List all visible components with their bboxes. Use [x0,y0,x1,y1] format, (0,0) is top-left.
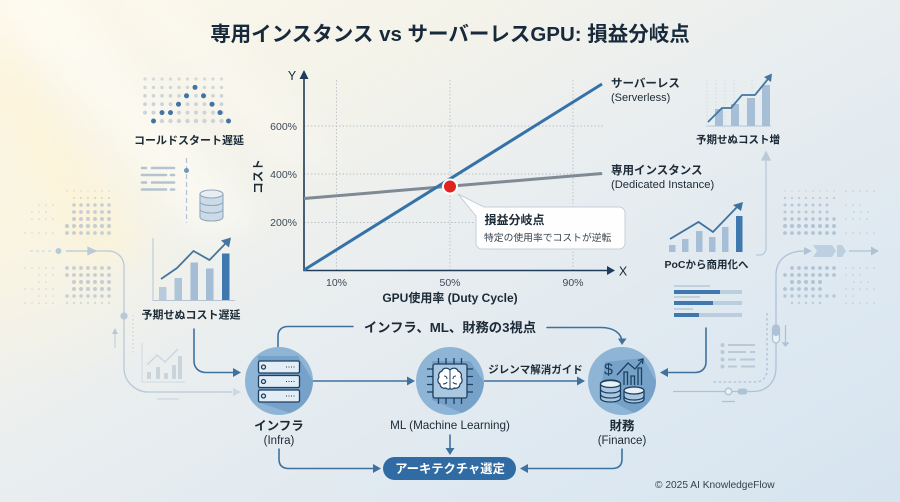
pill: architecture selection: アーキテクチャ選定 [395,462,505,476]
icon: chip with brain [427,358,473,404]
pill: architecture selection [383,457,516,480]
label: finance: (Finance) [598,435,646,447]
axis labels: 90% [562,277,584,289]
label: unexpected cost increase: 予期せぬコスト増 [696,133,780,146]
label: dedicated instance: 専用インスタンス [611,163,703,177]
icon: server rack [258,361,300,402]
title: 専用インスタンス vs サーバーレスGPU: 損益分岐点 [210,22,690,46]
chart: break-even line chart [253,69,628,305]
label: infra [254,419,304,447]
chart: faded growth icon [142,343,185,382]
label: serverless: サーバーレス [611,77,680,90]
connector: PoC to cost increase [756,152,770,255]
right dot patterns [785,191,880,303]
copyright: © 2025 AI KnowledgeFlow [655,480,775,491]
node: ML [416,347,484,415]
node: finance [588,347,656,415]
label: three perspectives: インフラ、ML、財務の3視点 [364,319,536,335]
label: dedicated instance [611,163,715,191]
callout: break-even: 損益分岐点 [484,212,545,227]
axis labels: 600% [270,121,297,133]
icon: progress bars [674,286,742,317]
axis labels: Y [288,69,297,83]
axis labels: X [619,264,628,278]
axis labels: 10% [326,277,347,289]
label: finance [598,418,646,447]
line: serverless [304,84,602,270]
axis labels [253,69,628,305]
chart: PoC to production [669,202,743,252]
label: unexpected cost latency: 予期せぬコスト遅延 [142,308,240,322]
label: cold start latency: コールドスタート遅延 [134,134,244,147]
label: ML: ML (Machine Learning) [390,419,510,432]
break-even point [443,180,457,194]
grid lines [304,80,603,270]
axis labels: GPU使用率 (Duty Cycle) [382,290,518,305]
label: infra: (Infra) [264,435,295,447]
icon: cold start dot matrix [145,79,231,124]
label: serverless: (Serverless) [611,92,670,104]
label: dilemma guide: ジレンマ解消ガイド [488,363,583,376]
label: finance: 財務 [609,418,635,433]
chart: unexpected cost increase [706,74,772,126]
axis labels: 200% [270,217,297,229]
axis labels: コスト [253,159,265,194]
label: infra: インフラ [254,419,304,433]
callout: break-even: 特定の使用率でコストが逆転 [484,231,612,244]
icon: coins and chart: $ [604,362,613,378]
left connector line [30,248,241,399]
axes [300,70,615,275]
icon: log lines and database [142,158,223,223]
label: dedicated instance: (Dedicated Instance) [611,179,715,191]
label: PoC to production: PoCから商用化へ [664,258,749,271]
chart: unexpected cost latency [153,238,235,300]
axis labels: 50% [439,277,461,289]
line: dedicated instance [304,174,602,198]
callout: break-even [458,194,625,249]
right connector with pipeline [673,245,879,402]
left dot patterns [25,191,116,303]
node: infra [245,347,313,415]
icon: faded list [720,343,755,368]
axis labels: 400% [270,169,297,181]
label: serverless [611,77,680,104]
flow arrows [194,326,706,473]
